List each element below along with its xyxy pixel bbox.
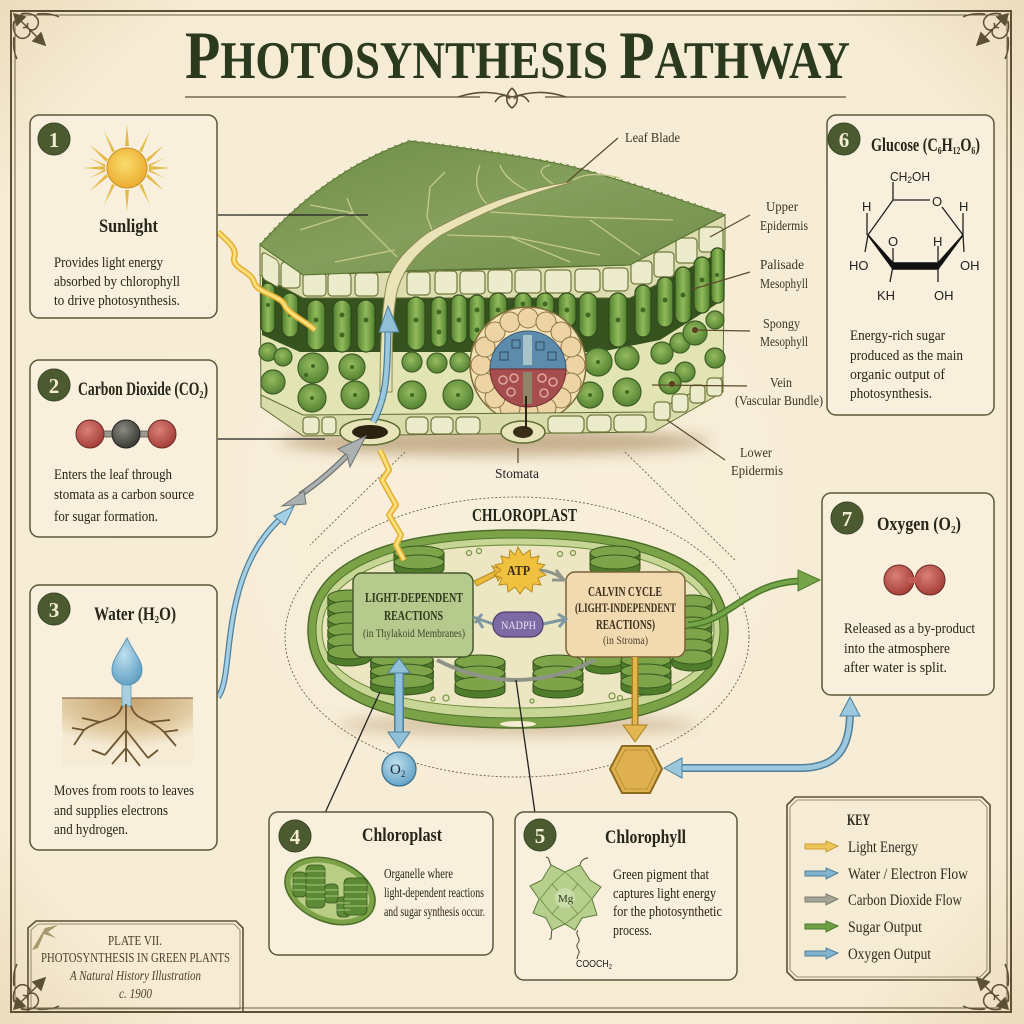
arrow: to ATP xyxy=(474,566,505,586)
heading: ) xyxy=(975,136,980,156)
leaf labels: Upper xyxy=(766,200,798,215)
glucose structural formula: H xyxy=(959,199,968,214)
icon: glucose hexagon xyxy=(610,746,662,793)
heading: ) xyxy=(203,380,208,400)
body text xyxy=(384,866,485,919)
leaf labels: Stomata xyxy=(495,467,540,482)
icon: O2 bubble xyxy=(382,752,416,786)
leaf labels: Lower xyxy=(740,446,772,461)
panel: key xyxy=(787,797,990,980)
arrow: O2 double arrow xyxy=(388,658,410,748)
heading: Water (H xyxy=(94,605,168,625)
heading: O xyxy=(960,136,971,156)
icon: O2 bubble: O xyxy=(390,762,401,778)
outer membrane xyxy=(308,530,728,728)
heading: 2 xyxy=(199,389,204,401)
chloroplast dots in palisade xyxy=(266,273,719,338)
body text: Energy-rich sugar xyxy=(850,328,945,344)
arrow: sugar down xyxy=(623,657,647,742)
heading: ) xyxy=(956,515,961,535)
leaf blade xyxy=(260,141,725,392)
leaf labels: Spongy xyxy=(763,317,800,332)
body text: produced as the main xyxy=(850,348,963,364)
key: oxygen output xyxy=(805,946,931,963)
key: water flow xyxy=(805,866,968,883)
caption text xyxy=(41,933,230,1001)
panel 6: glucose: 6 xyxy=(839,128,849,152)
glucose structural formula: OH xyxy=(960,258,980,273)
key: carbon dioxide flow: Carbon Dioxide Flow xyxy=(848,892,962,909)
panel 3: water: 3 xyxy=(49,598,59,622)
leaf labels: Mesophyll xyxy=(760,335,808,350)
arrow: sunlight zigzag into leaf xyxy=(218,232,315,330)
body text: captures light energy xyxy=(613,886,716,902)
light-dependent reactions box xyxy=(353,573,473,657)
leader: chloroplast to card 4 xyxy=(325,692,380,813)
body text xyxy=(613,867,722,939)
formula label: 2 xyxy=(609,964,612,971)
botanical sprig xyxy=(32,925,58,950)
key: oxygen output: Oxygen Output xyxy=(848,946,931,963)
heading: Chloroplast xyxy=(362,826,443,846)
calvin cycle box xyxy=(566,572,685,657)
panel 7: oxygen: 7 xyxy=(842,507,852,531)
calvin cycle box: REACTIONS) xyxy=(596,617,655,632)
body text: and supplies electrons xyxy=(54,803,168,819)
key: water flow: Water / Electron Flow xyxy=(848,866,968,883)
icon: CO2 molecule xyxy=(76,420,176,448)
heading: O) xyxy=(159,605,176,625)
leaf labels xyxy=(495,131,823,482)
heading: Oxygen (O xyxy=(877,515,963,535)
panel 6: glucose xyxy=(827,115,994,415)
heading: Sunlight xyxy=(99,217,159,237)
spongy cell dots xyxy=(304,327,698,400)
light-dependent reactions box: REACTIONS xyxy=(384,609,443,624)
caption text: A Natural History Illustration xyxy=(69,968,201,983)
icon: chloroplast xyxy=(275,845,385,937)
panel 2: carbon dioxide: 2 xyxy=(49,374,59,398)
caption text: PLATE VII. xyxy=(108,933,162,948)
number badge 5 xyxy=(524,819,556,851)
title: PHOTOSYNTHESIS PATHWAY xyxy=(185,17,850,93)
glucose structural formula: OH xyxy=(912,169,930,184)
heading: H xyxy=(942,136,953,156)
icon: O2 molecule xyxy=(884,565,945,595)
panel 5: chlorophyll: 5 xyxy=(535,824,545,848)
glucose structural formula: O xyxy=(888,234,898,249)
body text: photosynthesis. xyxy=(850,386,932,402)
body text: Moves from roots to leaves xyxy=(54,783,194,799)
leaf labels: Palisade xyxy=(760,258,804,273)
arrow: oxygen from glucose to card 7 xyxy=(664,697,860,778)
body text: process. xyxy=(613,923,652,939)
caption text: PHOTOSYNTHESIS IN GREEN PLANTS xyxy=(41,950,230,965)
panel 1: sunlight: 1 xyxy=(49,128,59,152)
calvin cycle box: (LIGHT-INDEPENDENT xyxy=(575,600,676,615)
leaf labels: (Vascular Bundle) xyxy=(735,394,823,409)
chloroplast heading: CHLOROPLAST xyxy=(472,505,577,525)
arrow: water transport in rib xyxy=(373,306,399,422)
icon: O2 bubble: 2 xyxy=(401,769,405,779)
icon: ATP starburst xyxy=(494,547,546,594)
body text: to drive photosynthesis. xyxy=(54,293,180,309)
cross-section body xyxy=(260,215,725,422)
icon: chlorophyll molecule: Mg xyxy=(558,893,574,905)
number badge 6 xyxy=(828,123,860,155)
arrow: ATP to Calvin cycle xyxy=(540,570,564,580)
body text xyxy=(54,255,180,309)
body text: Provides light energy xyxy=(54,255,163,271)
leaf labels: Epidermis xyxy=(731,464,783,479)
key: carbon dioxide flow xyxy=(805,892,962,909)
glucose structural formula: H xyxy=(862,199,871,214)
grey cycle arc xyxy=(437,660,595,680)
icon: sun xyxy=(83,124,171,212)
heading: 2 xyxy=(155,614,160,626)
heading: 6 xyxy=(971,146,975,157)
palisade shadow band xyxy=(262,245,723,352)
stoma main opening xyxy=(340,419,400,445)
arrow: carbon dioxide into stomata xyxy=(282,436,366,506)
heading: Carbon Dioxide (CO xyxy=(78,380,242,400)
number badge 3 xyxy=(38,593,70,625)
plate caption xyxy=(28,921,243,1012)
body text: for the photosynthetic xyxy=(613,904,722,920)
lower epidermis xyxy=(261,377,723,436)
leaf cross-section xyxy=(259,141,725,445)
icon: water drop and roots xyxy=(62,638,193,766)
shadow xyxy=(338,715,698,735)
glucose structural formula: HO xyxy=(849,258,868,273)
stroma dots xyxy=(431,548,622,703)
thylakoid grana stacks xyxy=(328,546,712,698)
title ornament xyxy=(185,88,846,108)
body text: after water is split. xyxy=(844,660,947,676)
heading: 6 xyxy=(938,146,942,157)
glucose structural formula: CH xyxy=(890,169,909,184)
panel 4: chloroplast: 4 xyxy=(290,825,301,849)
key: sugar output: Sugar Output xyxy=(848,919,922,936)
light-dependent reactions box: (in Thylakoid Membranes) xyxy=(363,626,465,640)
palisade mesophyll xyxy=(261,248,724,352)
leaf labels: Epidermis xyxy=(760,219,808,234)
glucose structural formula: OH xyxy=(934,288,954,303)
arrow: sugar output green xyxy=(688,570,820,625)
heading: 2 xyxy=(951,524,956,536)
panel 4: chloroplast xyxy=(269,812,493,955)
dotted magnification outline xyxy=(285,452,749,777)
leader: chlorophyll to card 5 xyxy=(516,680,535,813)
leaf labels: Vein xyxy=(770,376,792,391)
number badge 7 xyxy=(831,502,863,534)
body text xyxy=(54,783,194,838)
stroma xyxy=(322,545,714,708)
leaf labels: Leaf Blade xyxy=(625,131,680,146)
body text: light-dependent reactions xyxy=(384,885,484,900)
panel 5: chlorophyll xyxy=(515,812,737,980)
key: light energy: Light Energy xyxy=(848,839,918,856)
body text: Released as a by-product xyxy=(844,621,976,637)
formula label: COOCH xyxy=(576,958,615,970)
body text: stomata as a carbon source xyxy=(54,487,194,503)
soft shadow below leaf xyxy=(280,429,710,455)
body text: Green pigment that xyxy=(613,867,710,883)
light-dependent reactions box: LIGHT-DEPENDENT xyxy=(365,591,463,606)
icon: chlorophyll molecule xyxy=(530,857,601,959)
upper epidermis xyxy=(260,215,725,298)
panel 2: carbon dioxide xyxy=(30,360,217,537)
heading: 12 xyxy=(953,146,960,157)
body text: into the atmosphere xyxy=(844,641,950,657)
leaf labels: Mesophyll xyxy=(760,277,808,292)
arrow: light zigzag into chloroplast xyxy=(380,450,404,560)
NADPH pill with arrows xyxy=(473,612,566,637)
number badge 2 xyxy=(38,369,70,401)
NADPH pill with arrows: NADPH xyxy=(501,618,536,632)
number badge 4 xyxy=(279,820,311,852)
body text xyxy=(54,467,194,525)
body text: and sugar synthesis occur. xyxy=(384,904,485,919)
heading: Glucose (C xyxy=(871,136,958,156)
icon: ATP starburst: ATP xyxy=(507,563,530,578)
body text: and hydrogen. xyxy=(54,822,128,838)
membrane notch xyxy=(500,721,536,727)
panel 3: water xyxy=(30,585,217,850)
panel 7: oxygen xyxy=(822,493,994,695)
body text xyxy=(850,328,963,402)
glucose structural formula: 2 xyxy=(907,175,912,185)
body text: for sugar formation. xyxy=(54,509,158,525)
number badge 1 xyxy=(38,123,70,155)
key: sugar output xyxy=(805,919,922,936)
body text: Enters the leaf through xyxy=(54,467,172,483)
glucose structural formula xyxy=(849,169,980,303)
arrow: water up from roots xyxy=(218,506,294,697)
body text: absorbed by chlorophyll xyxy=(54,274,180,290)
spongy mesophyll xyxy=(259,311,725,412)
leader lines xyxy=(218,138,750,463)
inner membrane xyxy=(316,538,720,718)
glucose structural formula: O xyxy=(932,194,942,209)
calvin cycle box: CALVIN CYCLE xyxy=(588,585,662,600)
key heading: KEY xyxy=(847,812,870,829)
key: light energy xyxy=(805,839,918,856)
heading: Chlorophyll xyxy=(605,828,686,848)
caption text: c. 1900 xyxy=(119,986,152,1001)
chloroplast diagram xyxy=(308,530,728,735)
vein vascular bundle xyxy=(470,307,586,423)
body text xyxy=(844,621,976,676)
body text: organic output of xyxy=(850,367,945,383)
calvin cycle box: (in Stroma) xyxy=(603,633,648,647)
panel 1: sunlight xyxy=(30,115,217,318)
glucose structural formula: KH xyxy=(877,288,895,303)
stoma secondary opening xyxy=(501,396,545,443)
glucose structural formula: H xyxy=(933,234,942,249)
body text: Organelle where xyxy=(384,866,453,881)
